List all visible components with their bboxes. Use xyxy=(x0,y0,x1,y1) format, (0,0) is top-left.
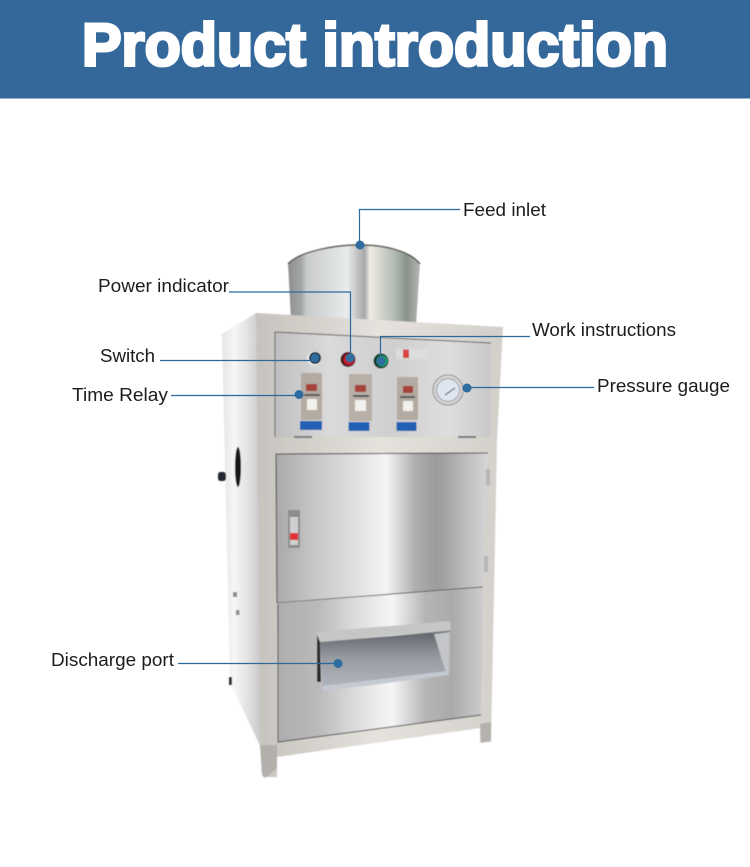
main front frame xyxy=(256,313,503,777)
button: red xyxy=(340,352,356,367)
button: green xyxy=(374,354,388,368)
label: Power indicator xyxy=(98,276,354,362)
label: Power indicator: Power indicator xyxy=(98,276,229,296)
label: Time Relay xyxy=(72,385,304,405)
pressure gauge xyxy=(433,375,463,405)
right leg xyxy=(480,722,491,743)
hopper xyxy=(288,245,420,325)
side knob xyxy=(218,472,226,481)
title: Product introduction xyxy=(82,12,668,78)
garlic peeling machine xyxy=(218,245,503,778)
label: Feed inlet: Feed inlet xyxy=(463,200,546,220)
label: Switch xyxy=(100,346,320,366)
label: Pressure gauge xyxy=(462,376,730,396)
button: switch xyxy=(307,352,321,366)
time relay 3 xyxy=(396,377,418,431)
label: Switch: Switch xyxy=(100,346,155,366)
control panel xyxy=(275,332,491,438)
opening bottom lip xyxy=(323,671,449,691)
discharge opening xyxy=(320,631,450,691)
side screws xyxy=(233,592,240,615)
time relay 1 xyxy=(300,373,322,430)
time relay 2 xyxy=(348,374,372,431)
lower panel with discharge port xyxy=(277,588,483,742)
label: Feed inlet xyxy=(356,200,546,250)
indicator label xyxy=(396,349,428,359)
left leg xyxy=(260,745,277,778)
label: Pressure gauge: Pressure gauge xyxy=(597,376,730,396)
label: Time Relay: Time Relay xyxy=(72,385,168,405)
panel hinges xyxy=(294,436,476,438)
label: Work instructions: Work instructions xyxy=(532,320,676,340)
side panel xyxy=(222,313,262,750)
door hinges xyxy=(484,469,490,572)
discharge hood xyxy=(317,621,451,642)
opening left edge xyxy=(317,635,321,682)
label: Work instructions xyxy=(376,320,676,366)
upper door xyxy=(276,453,490,603)
label: Discharge port xyxy=(51,650,342,670)
rear foot xyxy=(229,677,232,685)
door latch xyxy=(288,510,300,548)
opening slope xyxy=(434,632,450,675)
label: Discharge port: Discharge port xyxy=(51,650,174,670)
side port hole xyxy=(235,447,241,487)
header banner xyxy=(0,0,750,98)
